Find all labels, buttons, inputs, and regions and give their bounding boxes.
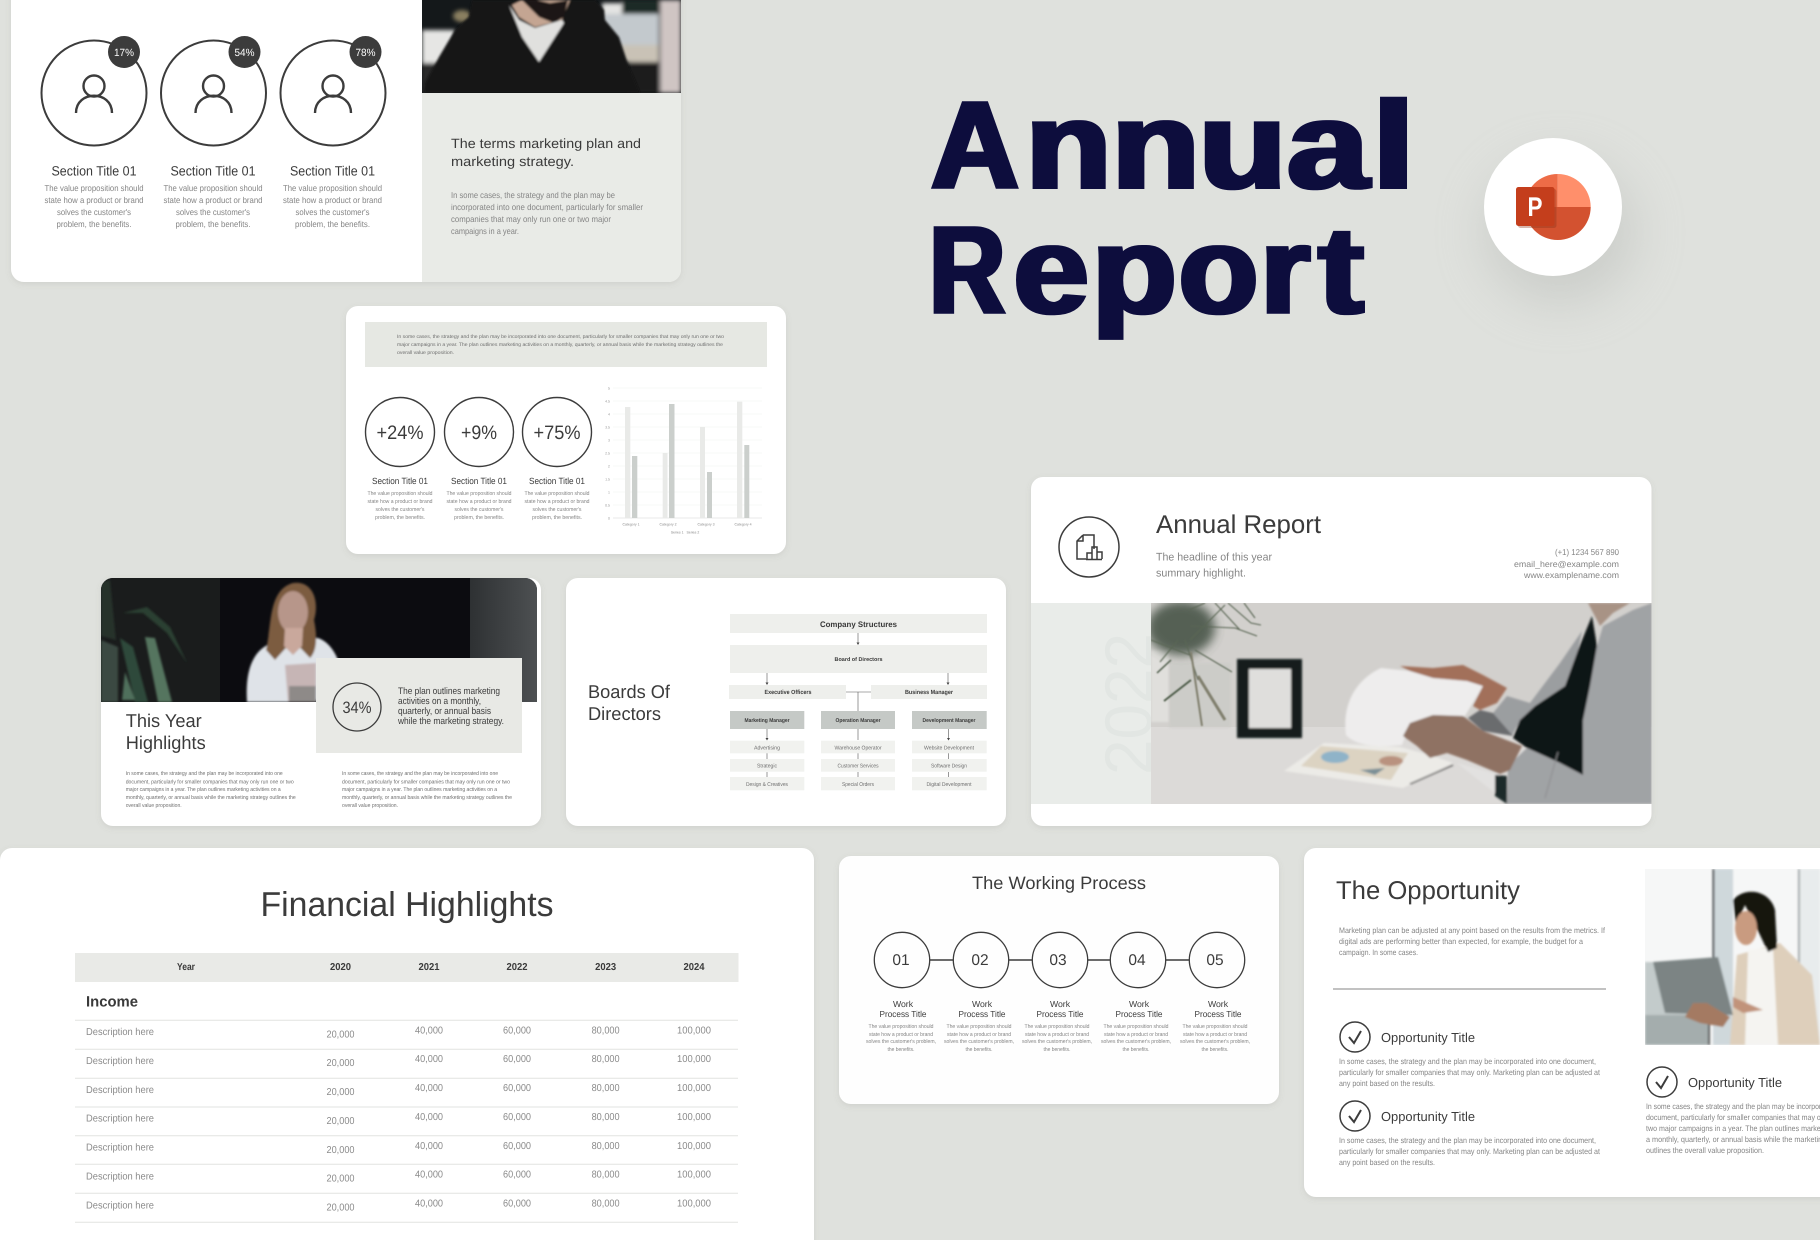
- table rows: 20,000: [326, 1058, 355, 1069]
- text block: intro: digital ads are performing better than expected, for example, the budget for a: [1339, 937, 1583, 946]
- table header: [75, 953, 738, 982]
- text block: left column: major campaigns in a year. The plan outlines marketing activities on a: [126, 787, 282, 793]
- step 04: The value proposition should: [1104, 1024, 1168, 1030]
- callout: 34% marketing plan: while the marketing strategy.: [397, 716, 504, 727]
- org chart: company structures: Advertising: [754, 746, 780, 752]
- side band: year 2022: 2022: [1091, 633, 1165, 775]
- bar chart: two series across four categories: Category 2: [659, 522, 677, 526]
- main title: Annual Report: e: [1014, 201, 1089, 340]
- heading: Financial Highlights: Financial Highlights: [260, 886, 554, 924]
- text block: left column: document, particularly for smaller companies that may only run one or two: [126, 780, 294, 786]
- org chart: company structures: Special Orders: [842, 782, 874, 788]
- step 05: Work: [1208, 999, 1229, 1009]
- step 03: Process Title: [1036, 1009, 1084, 1019]
- table header: 2020: [330, 962, 351, 973]
- stat: +9%: The value proposition should: [446, 491, 512, 497]
- opportunity item 2: particularly for smaller companies that may only. Marketing plan can be adjusted at: [1339, 1147, 1601, 1156]
- stat: 78% user circle: 78%: [356, 47, 376, 59]
- text block: intro: campaign. In some cases.: [1339, 948, 1418, 957]
- table rows: 40,000: [415, 1112, 443, 1123]
- step 03: Work: [1050, 999, 1071, 1009]
- opportunity item 1: any point based on the results.: [1339, 1079, 1435, 1088]
- stat: +75%: Section Title 01: [529, 476, 585, 486]
- step 05: The value proposition should: [1182, 1024, 1248, 1030]
- table rows: 40,000: [415, 1141, 443, 1152]
- opportunity item 2: In some cases, the strategy and the plan may be incorporated into one document,: [1339, 1136, 1596, 1145]
- panel: the opportunity slide: [1304, 848, 1820, 1197]
- step 05: 05: [1206, 952, 1224, 969]
- step 05: Process Title: [1194, 1009, 1242, 1019]
- callout: intro text band: [365, 322, 767, 367]
- table rows: 60,000: [503, 1198, 531, 1210]
- stat: +24%: +24%: [376, 422, 424, 444]
- opportunity item 1: Opportunity Title: [1381, 1030, 1475, 1045]
- stat: 17% user circle: solves the customer's: [57, 207, 131, 217]
- table rows: 40,000: [415, 1170, 443, 1181]
- main title: Annual Report: n: [1112, 76, 1200, 215]
- bar chart: two series across four categories: 2: [608, 464, 610, 468]
- org chart: company structures: Business Manager: [905, 689, 954, 696]
- step 04: 04: [1128, 952, 1146, 969]
- opportunity item 3: [1646, 1067, 1820, 1155]
- side panel: marketing strategy: marketing strategy.: [451, 154, 574, 169]
- text block: headline: The headline of this year: [1156, 552, 1272, 564]
- table rows: Description here: [86, 1027, 154, 1038]
- step 04: Work: [1129, 999, 1150, 1009]
- stat: 17% user circle: The value proposition should: [44, 183, 144, 193]
- icon: PowerPoint logo badge: [1484, 138, 1634, 302]
- text block: headline: [1156, 552, 1272, 580]
- opportunity item 1: [1339, 1022, 1601, 1088]
- step 01: state how a product or brand: [869, 1032, 933, 1038]
- side panel: marketing strategy: incorporated into one document, particularly for smaller: [451, 202, 643, 212]
- opportunity item 1: particularly for smaller companies that may only. Marketing plan can be adjusted at: [1339, 1068, 1601, 1077]
- table rows: 80,000: [592, 1054, 620, 1065]
- photo: man in black hoodie: [422, 0, 681, 93]
- stat: 17% user circle: state how a product or brand: [44, 195, 144, 205]
- step 03: The value proposition should: [1024, 1024, 1090, 1030]
- step 01: [866, 932, 936, 1053]
- main title: Annual Report: u: [1199, 76, 1286, 215]
- org chart: company structures: [729, 614, 987, 790]
- bar chart: two series across four categories: Series 1 Series 2: [671, 530, 699, 534]
- side panel: marketing strategy: The terms marketing plan and: [451, 136, 641, 151]
- bar chart: two series across four categories: Category 4: [734, 522, 752, 526]
- table rows: [75, 1020, 738, 1222]
- callout: intro text band: overall value proposition.: [397, 350, 454, 356]
- callout: 34% marketing plan: [316, 658, 522, 753]
- step 05: the benefits.: [1202, 1047, 1229, 1053]
- bar chart: two series across four categories: 4.5: [605, 400, 610, 404]
- heading: Boards Of Directors: Boards Of: [588, 681, 671, 702]
- stat: 17% user circle: problem, the benefits.: [56, 219, 132, 229]
- text block: intro: Marketing plan can be adjusted at any point based on the results from the metrics. If: [1339, 926, 1606, 935]
- stat: +24%: problem, the benefits.: [375, 515, 425, 521]
- stat: 78% user circle: state how a product or brand: [283, 195, 382, 205]
- photo: man with laptop: [1645, 869, 1820, 1045]
- table header: 2024: [684, 962, 705, 973]
- stat: +24%: solves the customer's: [376, 507, 425, 513]
- table rows: 80,000: [592, 1083, 620, 1094]
- bar chart: two series across four categories: Category 1: [622, 522, 640, 526]
- stat: 78% user circle: Section Title 01: [290, 164, 375, 178]
- step 03: 03: [1049, 952, 1067, 969]
- heading: The Working Process: The Working Process: [972, 873, 1146, 893]
- table rows: 100,000: [677, 1083, 711, 1094]
- stat: +75%: The value proposition should: [524, 491, 590, 497]
- stat: +24%: state how a product or brand: [368, 499, 432, 505]
- table rows: 40,000: [415, 1054, 443, 1065]
- bar chart: two series across four categories: 0.5: [605, 504, 610, 508]
- table rows: 100,000: [677, 1198, 711, 1210]
- table rows: 40,000: [415, 1198, 443, 1210]
- panel: working process slide: [839, 856, 1279, 1104]
- step 02: solves the customer's problem,: [944, 1039, 1014, 1045]
- main title: Annual Report: A: [931, 76, 1019, 215]
- opportunity item 3: Opportunity Title: [1688, 1075, 1782, 1090]
- stat: +75%: [522, 398, 592, 521]
- panel: this year highlights slide: [101, 578, 541, 826]
- table rows: 60,000: [503, 1141, 531, 1152]
- org chart: company structures: Design & Creatives: [746, 782, 788, 788]
- stat: 54% user circle: 54%: [234, 47, 254, 59]
- bar chart: two series across four categories: 1: [608, 490, 610, 494]
- callout: 34% marketing plan: quarterly, or annual basis: [398, 706, 491, 717]
- stat: +24%: The value proposition should: [368, 491, 432, 497]
- step 02: [944, 932, 1014, 1053]
- heading: Boards Of Directors: [588, 681, 671, 724]
- stat: +9%: solves the customer's: [454, 507, 504, 513]
- stat: +9%: state how a product or brand: [446, 499, 512, 505]
- table rows: 100,000: [677, 1170, 711, 1181]
- stat: 54% user circle: problem, the benefits.: [176, 219, 250, 229]
- main title: Annual Report: p: [1092, 201, 1177, 340]
- stat: +9%: +9%: [461, 422, 497, 444]
- table rows: Description here: [86, 1143, 154, 1154]
- heading: Annual Report: Annual Report: [1156, 511, 1321, 539]
- stat: +9%: Section Title 01: [451, 476, 507, 486]
- stat: +9%: problem, the benefits.: [454, 515, 504, 521]
- table rows: 100,000: [677, 1141, 711, 1152]
- side panel: marketing strategy: companies that may only run one or two major: [451, 214, 611, 224]
- stat: 54% user circle: The value proposition should: [164, 183, 263, 193]
- panel: annual report cover slide: [1031, 477, 1652, 826]
- side panel: marketing strategy: In some cases, the strategy and the plan may be: [451, 190, 615, 200]
- table header: 2023: [595, 962, 617, 973]
- step 02: Process Title: [958, 1009, 1006, 1019]
- step 04: [1101, 932, 1171, 1053]
- stat: 54% user circle: solves the customer's: [176, 207, 250, 217]
- heading: This Year Highlights: Highlights: [126, 732, 206, 753]
- step 01: 01: [892, 952, 910, 969]
- text block: headline: summary highlight.: [1156, 568, 1246, 580]
- table rows: Description here: [86, 1200, 154, 1211]
- table rows: 20,000: [326, 1029, 355, 1040]
- bar chart: two series across four categories: 1.5: [605, 478, 610, 482]
- bar chart: two series across four categories: 5: [608, 386, 610, 390]
- text block: right column: [342, 771, 512, 809]
- table rows: 80,000: [592, 1025, 620, 1036]
- table rows: 60,000: [503, 1112, 531, 1123]
- stat: 54% user circle: state how a product or brand: [164, 195, 263, 205]
- table rows: 20,000: [326, 1174, 355, 1185]
- main title: Annual Report: r: [1261, 201, 1310, 340]
- stat: 17% user circle: 17%: [114, 47, 134, 59]
- org chart: company structures: Customer Services: [838, 764, 879, 770]
- bar chart: two series across four categories: 2.5: [605, 452, 610, 456]
- text block: left column: monthly, quarterly, or annual basis while the marketing strategy outlines the: [126, 795, 296, 801]
- main title: Annual Report: n: [1026, 76, 1112, 215]
- icon: PowerPoint logo badge: P: [1528, 192, 1542, 222]
- callout: 34% marketing plan: activities on a monthly,: [398, 696, 481, 707]
- step 03: the benefits.: [1044, 1047, 1071, 1053]
- bar chart: two series across four categories: 3.5: [605, 426, 610, 430]
- step 01: the benefits.: [888, 1047, 915, 1053]
- step 04: state how a product or brand: [1104, 1032, 1168, 1038]
- org chart: company structures: Strategic: [757, 764, 777, 770]
- heading: The Opportunity: The Opportunity: [1336, 877, 1520, 905]
- step 01: Process Title: [880, 1009, 927, 1019]
- photo: hands leafing through a report: [1147, 601, 1652, 804]
- table section label: Income: Income: [86, 994, 138, 1011]
- panel: boards of directors slide: [566, 578, 1006, 826]
- process connectors: [930, 959, 1189, 961]
- table rows: 60,000: [503, 1054, 531, 1065]
- panel: audience percentages slide: [11, 0, 681, 282]
- table rows: Description here: [86, 1056, 154, 1067]
- table rows: 40,000: [415, 1025, 443, 1036]
- text block: contact details: email_here@example.com: [1514, 559, 1619, 569]
- stat: +75%: state how a product or brand: [524, 499, 590, 505]
- org chart: company structures: Development Manager: [922, 718, 976, 724]
- photo: woman with magazine: [101, 578, 541, 702]
- table rows: 80,000: [592, 1170, 620, 1181]
- stat: 17% user circle: [42, 36, 146, 229]
- bar chart: two series across four categories: Category 3: [697, 522, 715, 526]
- bar chart: two series across four categories: 4: [608, 412, 610, 416]
- step 04: the benefits.: [1122, 1047, 1150, 1053]
- text block: right column: major campaigns in a year. The plan outlines marketing activities on a: [342, 787, 498, 793]
- org chart: company structures: Executive Officers: [764, 689, 812, 696]
- text block: right column: In some cases, the strategy and the plan may be incorporated into one: [342, 771, 498, 777]
- bar chart: two series across four categories: 3: [608, 438, 610, 442]
- opportunity item 2: [1339, 1101, 1601, 1167]
- table header: 2021: [418, 962, 440, 973]
- bar chart: two series across four categories: [605, 386, 762, 534]
- text block: contact details: www.examplename.com: [1523, 570, 1619, 580]
- text block: left column: In some cases, the strategy and the plan may be incorporated into one: [126, 771, 283, 777]
- table rows: 80,000: [592, 1112, 620, 1123]
- step 05: state how a product or brand: [1183, 1032, 1247, 1038]
- step 01: solves the customer's problem,: [866, 1039, 936, 1045]
- stat: 78% user circle: solves the customer's: [296, 207, 370, 217]
- stat: +75%: problem, the benefits.: [532, 515, 582, 521]
- table rows: 20,000: [326, 1087, 355, 1098]
- table rows: 20,000: [326, 1202, 355, 1214]
- org chart: company structures: Warehouse Operator: [834, 746, 882, 752]
- heading: Boards Of Directors: Directors: [588, 703, 661, 724]
- step 02: state how a product or brand: [947, 1032, 1011, 1038]
- stat: +75%: +75%: [534, 422, 580, 444]
- step 01: The value proposition should: [868, 1024, 934, 1030]
- main title: Annual Report: R: [929, 201, 1005, 340]
- opportunity item 2: Opportunity Title: [1381, 1109, 1475, 1124]
- table rows: Description here: [86, 1085, 154, 1096]
- step 05: solves the customer's problem,: [1180, 1039, 1250, 1045]
- table rows: 80,000: [592, 1198, 620, 1210]
- stat: +24%: Section Title 01: [372, 476, 428, 486]
- text block: right column: document, particularly for smaller companies that may only run one or two: [342, 780, 510, 786]
- step 02: Work: [972, 999, 993, 1009]
- icon: document with bar chart: [1059, 517, 1119, 577]
- org chart: company structures: Software Design: [931, 764, 967, 770]
- side panel: marketing strategy: [422, 93, 681, 282]
- stat: 54% user circle: Section Title 01: [170, 164, 256, 178]
- org chart: company structures: Marketing Manager: [744, 718, 790, 724]
- callout: intro text band: major campaigns in a year. The plan outlines marketing activities on a monthly, quarterly, or annual basis while the marketing strategy outlines the: [397, 342, 723, 348]
- table rows: 40,000: [415, 1083, 443, 1094]
- heading: This Year Highlights: [126, 710, 206, 753]
- text block: contact details: [1514, 547, 1619, 580]
- table rows: 60,000: [503, 1025, 531, 1036]
- step 04: solves the customer's problem,: [1101, 1039, 1171, 1045]
- org chart: company structures: Operation Manager: [836, 718, 881, 724]
- step 03: [1022, 932, 1092, 1053]
- text block: left column: [126, 771, 296, 809]
- opportunity item 1: In some cases, the strategy and the plan may be incorporated into one document,: [1339, 1057, 1596, 1066]
- main title: Annual Report: [929, 76, 1415, 340]
- table rows: Description here: [86, 1114, 154, 1125]
- step 03: state how a product or brand: [1025, 1032, 1089, 1038]
- opportunity item 2: any point based on the results.: [1339, 1158, 1435, 1167]
- stat: +24%: [366, 398, 434, 521]
- callout: intro text band: In some cases, the strategy and the plan may be incorporated into one document, particularly for smaller companies that may only run one or two: [397, 334, 724, 340]
- stat: 78% user circle: problem, the benefits.: [295, 219, 370, 229]
- text block: right column: overall value proposition.: [342, 803, 398, 809]
- step 05: [1180, 932, 1250, 1053]
- side panel: marketing strategy: campaigns in a year.: [451, 226, 519, 236]
- text block: contact details: (+1) 1234 567 890: [1555, 547, 1619, 557]
- org chart: company structures: Company Structures: [820, 620, 898, 629]
- table header: 2022: [506, 962, 528, 973]
- heading: This Year Highlights: This Year: [126, 710, 202, 731]
- main title: Annual Report: l: [1372, 76, 1415, 215]
- text block: left column: overall value proposition.: [126, 803, 182, 809]
- table rows: 20,000: [326, 1116, 355, 1127]
- table header: Year: [177, 962, 195, 973]
- main title: Annual Report: t: [1318, 201, 1364, 340]
- table rows: 60,000: [503, 1170, 531, 1181]
- stat: 78% user circle: [280, 36, 386, 229]
- panel: growth statistics slide: [346, 306, 786, 554]
- step 03: solves the customer's problem,: [1022, 1039, 1092, 1045]
- step 04: Process Title: [1116, 1009, 1163, 1019]
- callout: 34% marketing plan: The plan outlines marketing: [398, 686, 500, 697]
- table rows: Description here: [86, 1171, 154, 1182]
- org chart: company structures: Board of Directors: [834, 657, 882, 663]
- table rows: 80,000: [592, 1141, 620, 1152]
- table rows: 20,000: [326, 1145, 355, 1156]
- main title: Annual Report: a: [1287, 76, 1371, 215]
- bar chart: two series across four categories: 0: [608, 516, 610, 520]
- text block: right column: monthly, quarterly, or annual basis while the marketing strategy outlines the: [342, 795, 512, 801]
- table rows: 60,000: [503, 1083, 531, 1094]
- org chart: company structures: Digital Development: [926, 782, 972, 788]
- stat: 17% user circle: Section Title 01: [52, 164, 136, 178]
- step 01: Work: [893, 999, 914, 1009]
- step 02: 02: [971, 952, 989, 969]
- step 02: the benefits.: [966, 1047, 993, 1053]
- panel: financial highlights slide: [0, 848, 814, 1240]
- stat: +9%: [444, 398, 514, 521]
- stat: 78% user circle: The value proposition should: [283, 183, 382, 193]
- stat: +75%: solves the customer's: [532, 507, 582, 513]
- org chart: company structures: Website Development: [924, 746, 974, 752]
- table rows: 100,000: [677, 1025, 711, 1036]
- opportunity item 3: outlines the overall value proposition.: [1646, 1146, 1764, 1155]
- main title: Annual Report: o: [1179, 201, 1258, 340]
- step 02: The value proposition should: [946, 1024, 1012, 1030]
- stat: 54% user circle: [161, 36, 266, 229]
- table rows: 100,000: [677, 1112, 711, 1123]
- side band: year 2022: [1031, 603, 1151, 804]
- text block: intro: [1339, 926, 1606, 957]
- callout: 34% marketing plan: 34%: [342, 699, 372, 717]
- table rows: 100,000: [677, 1054, 711, 1065]
